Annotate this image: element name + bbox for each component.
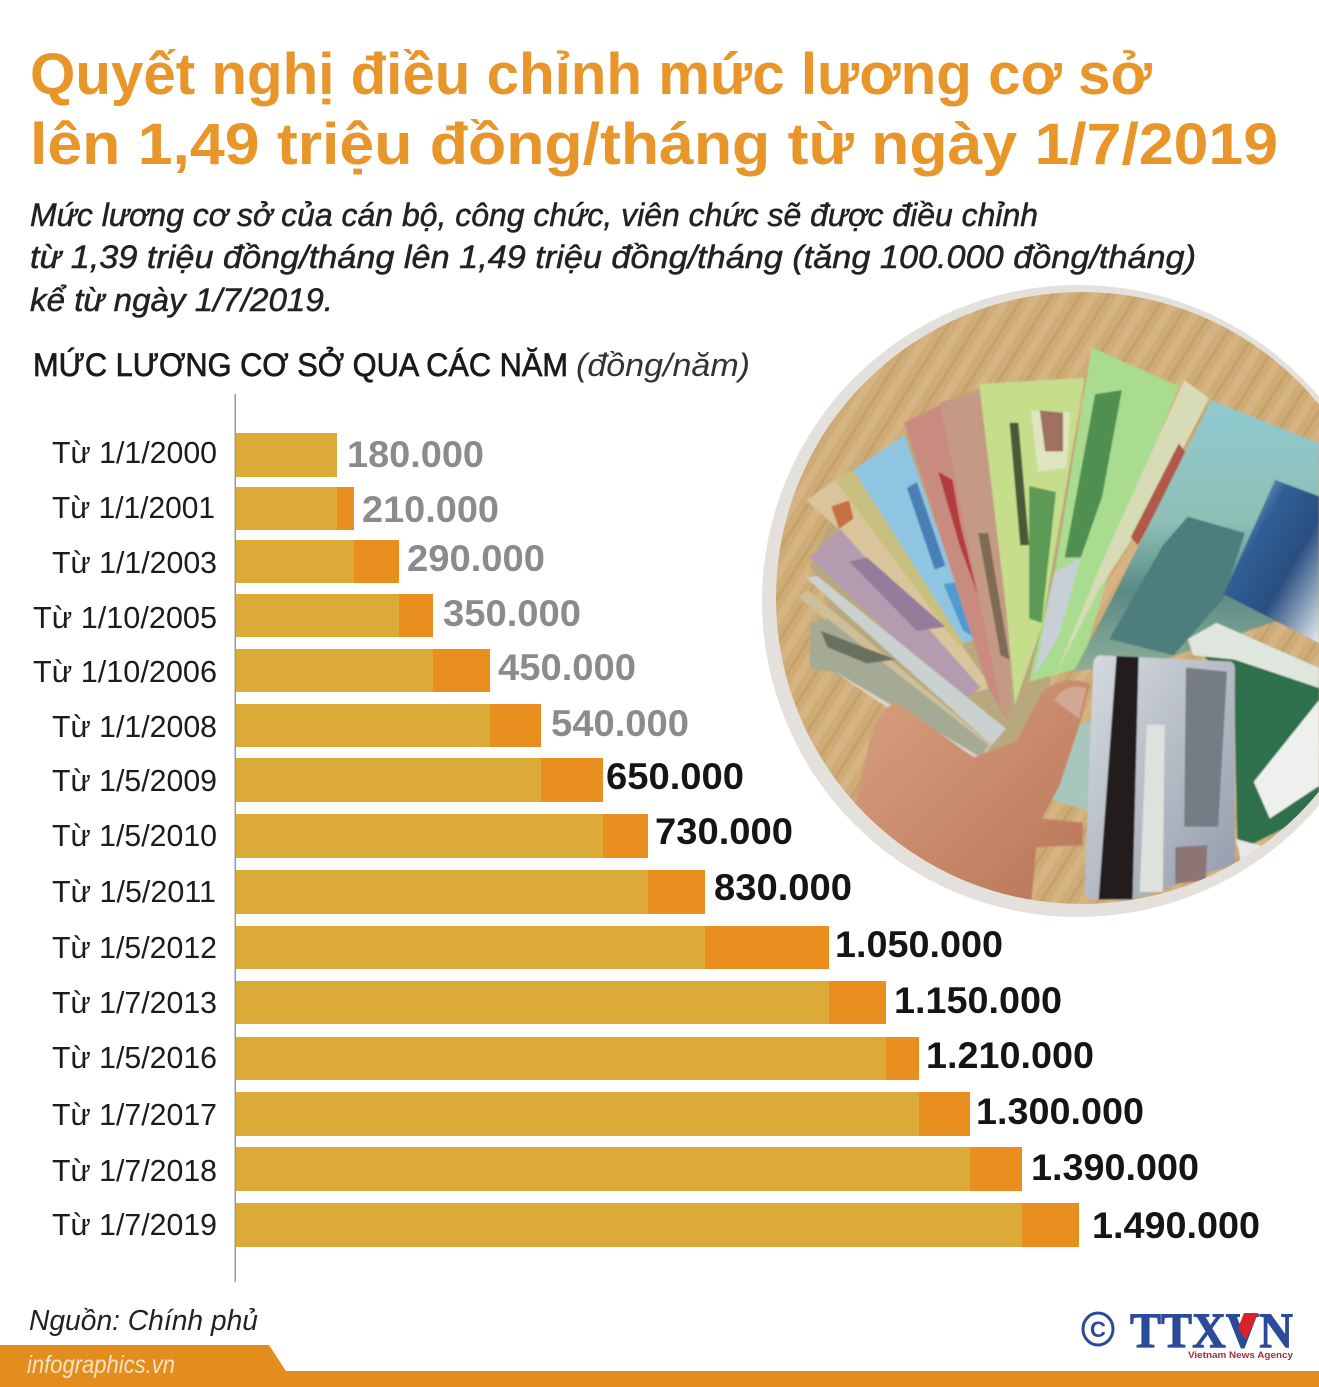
row 2017: 1.300.000 [976,1091,1144,1132]
row 2006 [33,647,636,692]
row 2001 [52,487,499,530]
row 2006: 450.000 [498,647,636,688]
row 2003 [52,538,545,583]
row 2013: Từ 1/7/2013 [52,985,217,1020]
intro text: từ 1,39 triệu đồng/tháng lên 1,49 triệu đồng/tháng (tăng 100.000 đồng/tháng) [30,239,1196,275]
logo: TTXVN: Vietnam News Agency [1188,1350,1294,1361]
row 2000 [52,433,484,477]
chart: base salary by year [33,433,1260,1247]
chart heading: MỨC LƯƠNG CƠ SỞ QUA CÁC NĂM [33,347,568,383]
row 2001: 210.000 [362,489,499,530]
row 2016: Từ 1/5/2016 [52,1040,217,1075]
row 2003: 290.000 [407,538,545,579]
row 2016: 1.210.000 [926,1035,1094,1076]
row 2019: Từ 1/7/2019 [52,1207,217,1242]
logo: TTXVN: C [1090,1317,1106,1342]
source note: Nguồn: Chính phủ [29,1305,258,1337]
row 2008 [52,703,689,747]
title [30,42,1278,177]
row 2009 [52,756,744,802]
chart heading: (đồng/năm) [576,347,750,383]
row 2008: 540.000 [551,703,689,744]
chart axis [234,394,236,1282]
row 2010 [52,811,793,858]
row 2005: Từ 1/10/2005 [33,600,217,635]
row 2019: 1.490.000 [1092,1205,1260,1246]
row 2010: Từ 1/5/2010 [52,818,217,853]
row 2000: Từ 1/1/2000 [52,435,217,470]
title: Quyết nghị điều chỉnh mức lương cơ sở [30,42,1153,107]
row 2010: 730.000 [655,811,793,852]
logo: TTXVN: TTXVN [1130,1302,1293,1358]
row 2012 [52,924,1003,969]
row 2016 [52,1035,1094,1080]
intro text [30,197,1196,318]
row 2013: 1.150.000 [894,980,1062,1021]
row 2009: 650.000 [606,756,744,797]
row 2008: Từ 1/1/2008 [52,709,217,744]
title: lên 1,49 triệu đồng/tháng từ ngày 1/7/2019 [30,112,1278,177]
row 2005: 350.000 [443,593,581,634]
row 2018: 1.390.000 [1031,1147,1199,1188]
photo: hand holding banknotes and cards [760,280,1319,920]
row 2011: 830.000 [714,867,852,908]
row 2017: Từ 1/7/2017 [52,1097,217,1132]
row 2011: Từ 1/5/2011 [52,874,216,909]
row 2005 [33,593,581,637]
intro text: Mức lương cơ sở của cán bộ, công chức, viên chức sẽ được điều chỉnh [30,197,1038,233]
row 2018 [52,1147,1199,1191]
row 2012: Từ 1/5/2012 [52,930,217,965]
row 2019 [52,1203,1260,1247]
row 2017 [52,1091,1144,1136]
row 2006: Từ 1/10/2006 [33,654,217,689]
row 2000: 180.000 [347,434,484,475]
footer band [0,1345,1319,1387]
row 2001: Từ 1/1/2001 [52,490,215,525]
row 2009: Từ 1/5/2009 [52,763,217,798]
footer band: infographics.vn [27,1351,175,1379]
row 2012: 1.050.000 [835,924,1003,965]
row 2003: Từ 1/1/2003 [52,545,217,580]
intro text: kể từ ngày 1/7/2019. [30,282,333,318]
row 2018: Từ 1/7/2018 [52,1153,217,1188]
row 2011 [52,867,852,914]
row 2013 [52,980,1062,1024]
